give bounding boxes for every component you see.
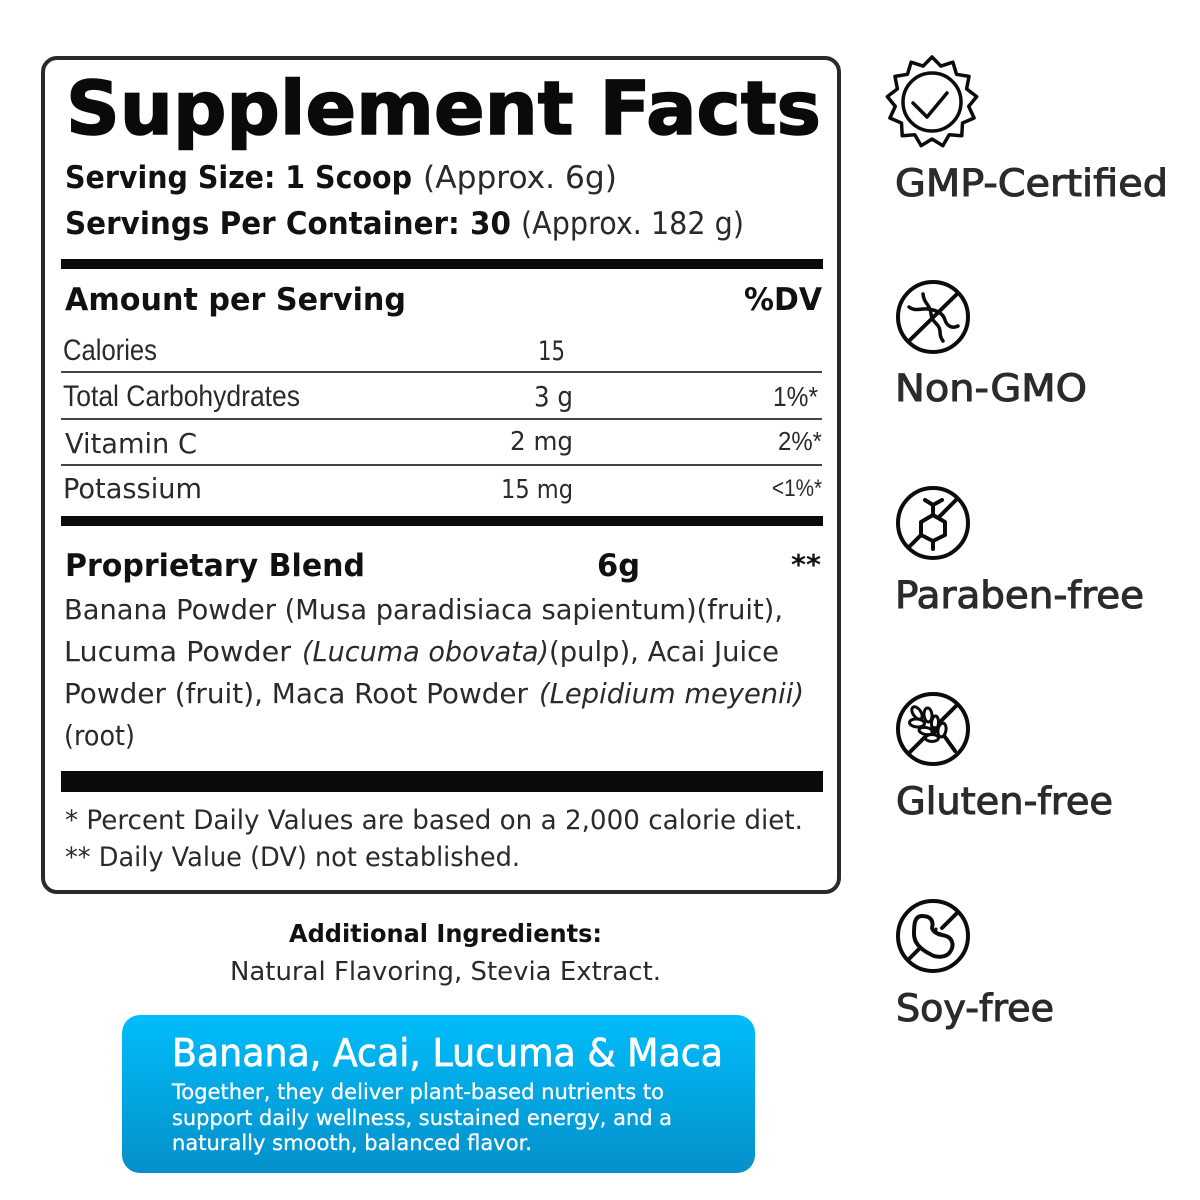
label: Soy-free: Soy-free	[896, 987, 1054, 1030]
additional ingredients: Additional Ingredients:	[289, 919, 602, 948]
nutrient rows: Potassium	[63, 472, 202, 505]
proprietary blend	[64, 548, 821, 752]
icon: non-GMO	[898, 282, 968, 352]
proprietary blend: Banana Powder (Musa paradisiaca sapientum)(fruit),	[64, 593, 783, 626]
nutrient rows: Total Carbohydrates	[63, 380, 300, 413]
table header	[65, 282, 822, 318]
icon: GMP seal	[887, 57, 977, 146]
callout: banana, acai, lucuma and maca	[122, 1015, 755, 1173]
footnotes: ** Daily Value (DV) not established.	[65, 842, 520, 873]
label: GMP-Certified: GMP-Certified	[895, 162, 1168, 205]
nutrient rows: 15 mg	[501, 475, 573, 505]
footnotes: * Percent Daily Values are based on a 2,000 calorie diet.	[65, 805, 803, 836]
nutrient rows: 2 mg	[510, 427, 573, 457]
title: Supplement Facts	[66, 66, 821, 152]
nutrient rows: 3 g	[534, 380, 573, 413]
serving information: (Approx. 6g)	[423, 160, 617, 196]
label: Gluten-free: Gluten-free	[896, 780, 1113, 823]
panel: supplement facts	[43, 58, 839, 892]
proprietary blend: 6g	[597, 548, 640, 584]
nutrient rows: Calories	[63, 334, 157, 367]
icon: gluten-free	[898, 694, 968, 764]
callout: banana, acai, lucuma and maca: Banana, Acai, Lucuma & Maca	[172, 1031, 723, 1075]
proprietary blend: (Lepidium meyenii)	[539, 677, 804, 710]
proprietary blend: Proprietary Blend	[65, 548, 365, 584]
proprietary blend: Powder (fruit), Maca Root Powder	[64, 677, 528, 710]
icon: paraben-free	[898, 488, 968, 558]
nutrient rows: Vitamin C	[65, 427, 197, 460]
nutrient rows: 1%*	[773, 381, 818, 412]
additional ingredients	[230, 919, 661, 987]
serving information	[65, 160, 744, 242]
serving information: Serving Size: 1 Scoop	[65, 160, 412, 196]
proprietary blend: (pulp), Acai Juice	[549, 635, 779, 668]
nutrient rows	[61, 334, 822, 505]
serving information: (Approx. 182 g)	[521, 206, 744, 242]
nutrient rows: 15	[538, 336, 565, 367]
proprietary blend: (root)	[64, 719, 135, 752]
label: Non-GMO: Non-GMO	[895, 367, 1087, 410]
label: Paraben-free: Paraben-free	[895, 574, 1144, 617]
serving information: Servings Per Container: 30	[65, 206, 511, 242]
callout: banana, acai, lucuma and maca: Together, they deliver plant-based nutrients to	[171, 1080, 664, 1104]
table header: Amount per Serving	[65, 282, 406, 318]
callout: banana, acai, lucuma and maca: naturally smooth, balanced flavor.	[172, 1131, 532, 1155]
proprietary blend: Lucuma Powder	[64, 635, 291, 668]
proprietary blend: **	[791, 548, 821, 581]
footnotes	[65, 805, 803, 873]
nutrient rows: <1%*	[772, 475, 822, 502]
icon: soy-free	[898, 901, 968, 971]
additional ingredients: Natural Flavoring, Stevia Extract.	[230, 957, 661, 987]
proprietary blend: (Lucuma obovata)	[302, 635, 549, 668]
nutrient rows: 2%*	[778, 426, 822, 456]
callout: banana, acai, lucuma and maca: support daily wellness, sustained energy, and a	[172, 1106, 672, 1130]
table header: %DV	[744, 282, 822, 318]
